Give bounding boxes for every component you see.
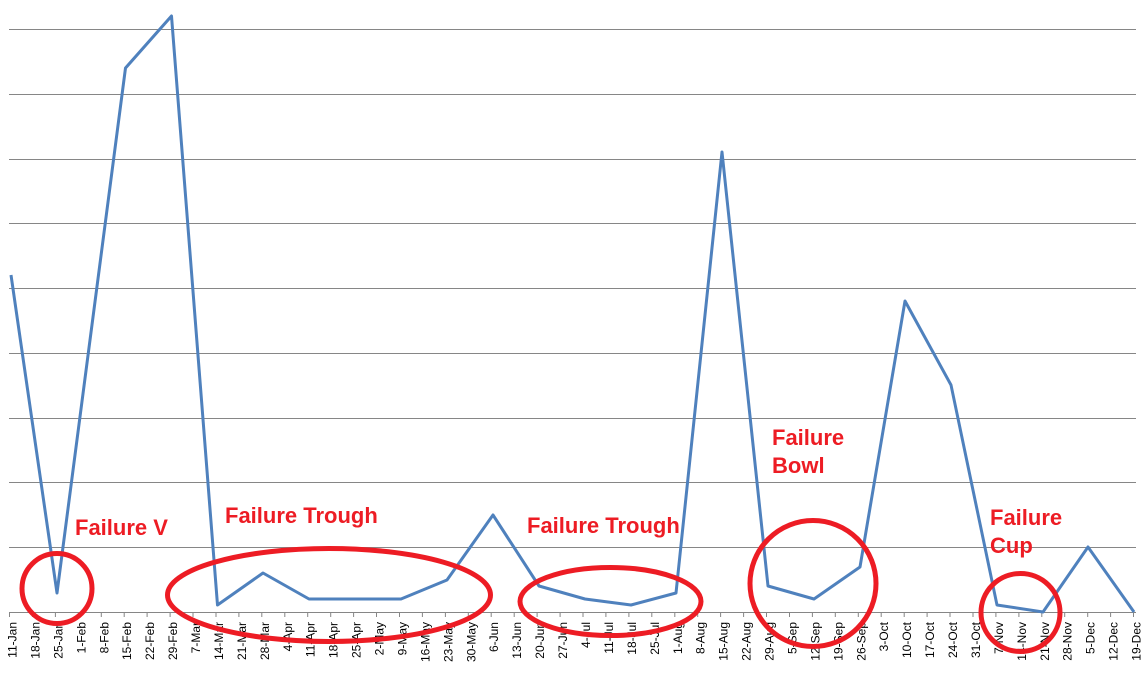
label: failure trough 1: Failure Trough [225, 503, 378, 528]
x axis date labels: 20-Jun [533, 622, 547, 659]
x axis date labels: 31-Oct [969, 621, 983, 658]
label: failure bowl: Failure [772, 425, 844, 450]
label: failure cup: Failure [990, 505, 1062, 530]
x axis date labels: 15-Feb [120, 622, 134, 660]
label: failure cup: Cup [990, 533, 1033, 558]
x axis [6, 612, 1144, 662]
x axis date labels: 21-Nov [1038, 622, 1052, 661]
x axis date labels: 7-Mar [189, 622, 203, 653]
x axis date labels [6, 621, 1144, 662]
circle: failure V [22, 554, 92, 624]
x axis date labels: 28-Nov [1061, 622, 1075, 661]
label: failure V: Failure V [75, 515, 168, 540]
x axis date labels: 7-Nov [992, 622, 1006, 654]
x axis date labels: 19-Dec [1130, 622, 1144, 661]
x axis date labels: 8-Aug [694, 622, 708, 654]
x axis date labels: 13-Jun [510, 622, 524, 659]
circle: failure bowl [750, 520, 876, 646]
x axis date labels: 15-Aug [717, 622, 731, 661]
x axis date labels: 22-Feb [143, 622, 157, 660]
x axis date labels: 2-May [372, 622, 386, 655]
x axis date labels: 4-Jul [579, 622, 593, 648]
x axis date labels: 29-Feb [166, 622, 180, 660]
x axis date labels: 25-Jul [648, 622, 662, 655]
x axis date labels: 21-Mar [235, 622, 249, 660]
x axis date labels: 26-Sep [854, 622, 868, 661]
ellipse: failure trough 2 [520, 568, 701, 636]
x axis date labels: 30-May [464, 622, 478, 662]
x axis date labels: 3-Oct [877, 621, 891, 651]
x axis date labels: 17-Oct [923, 621, 937, 658]
x axis date labels: 12-Sep [808, 622, 822, 661]
x axis date labels: 24-Oct [946, 621, 960, 658]
x axis date labels: 10-Oct [900, 621, 914, 658]
x axis date labels: 8-Feb [97, 622, 111, 653]
x axis date labels: 14-Mar [212, 622, 226, 660]
ellipse: failure trough 1 [168, 548, 490, 642]
label: failure bowl: Bowl [772, 453, 825, 478]
x axis date labels: 25-Jan [51, 622, 65, 659]
x axis date labels: 27-Jun [556, 622, 570, 659]
circle: failure cup [981, 574, 1060, 652]
x axis date labels: 4-Apr [281, 622, 295, 651]
x axis date labels: 6-Jun [487, 622, 501, 652]
x axis date labels: 28-Mar [258, 622, 272, 660]
x axis date labels: 14-Nov [1015, 622, 1029, 661]
x axis date labels: 22-Aug [740, 622, 754, 661]
x axis date labels: 23-May [441, 622, 455, 662]
x axis date labels: 11-Jul [602, 622, 616, 654]
x axis date labels: 1-Feb [74, 622, 88, 653]
x axis date labels: 18-Jul [625, 622, 639, 655]
label: failure trough 2: Failure Trough [527, 513, 680, 538]
x axis date labels: 16-May [418, 622, 432, 662]
x axis date labels: 5-Sep [786, 622, 800, 654]
x axis date labels: 18-Jan [28, 622, 42, 659]
x axis date labels: 9-May [396, 622, 410, 655]
x axis date labels: 11-Apr [304, 622, 318, 657]
x axis date labels: 18-Apr [327, 622, 341, 658]
x axis date labels: 11-Jan [6, 622, 20, 658]
x axis date labels: 25-Apr [350, 622, 364, 658]
x axis date labels: 1-Aug [671, 622, 685, 654]
x axis date labels: 5-Dec [1084, 622, 1098, 654]
x axis date labels: 12-Dec [1107, 622, 1121, 661]
x axis date labels: 19-Sep [831, 622, 845, 661]
x axis date labels: 29-Aug [762, 622, 776, 661]
